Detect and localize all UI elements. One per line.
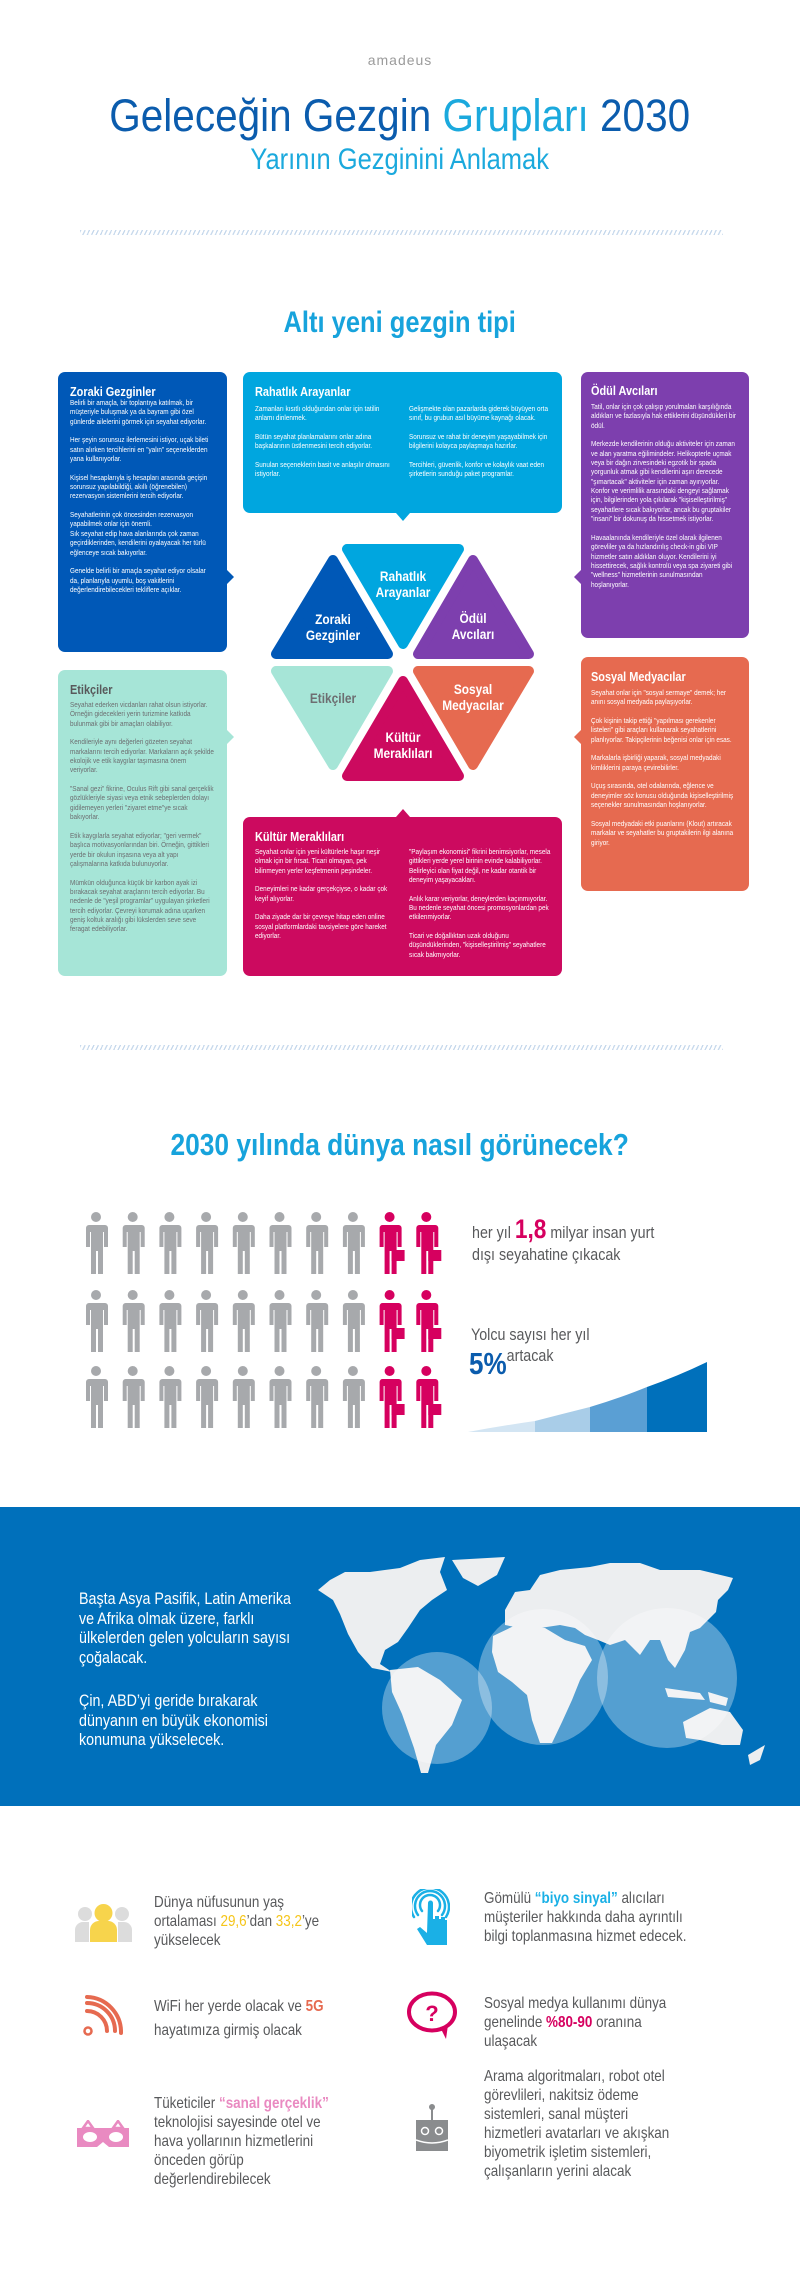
text: 5%artacak (469, 1346, 553, 1381)
heading: six traveller types: Altı yeni gezgin tipi (284, 306, 516, 339)
chart: hexagon of six traveller types (271, 544, 534, 781)
triangle: Ödül Avcıları: Ödül (459, 610, 487, 626)
text: age average: Dünya nüfusunun yaş (154, 1894, 284, 1911)
text: China economy: konumuna yükselecek. (79, 1730, 224, 1749)
text: bio signal: Gömülü “biyo sinyal” alıcıları (484, 1890, 665, 1907)
panel: Sosyal Medyacılar: Sosyal medyadaki etki puanlarını (Klout) artıracak markalar ve seyahatler bu gruptakilerin ilgi alanına giriyor. (591, 819, 733, 846)
text: virtual reality: önceden görüp (154, 2152, 244, 2169)
stat: 1.8 billion travellers (472, 1214, 654, 1264)
text: growth regions: Başta Asya Pasifik, Latin Amerika (79, 1589, 291, 1608)
text: virtual reality: hava yollarının hizmetlerini (154, 2133, 313, 2150)
panel: Etikçiler: "Sanal gezi" fikrine, Oculus Rift gibi sanal gerçeklik gözlükleriyle siyasi veya etnik sebeplerden dolayı gidilemeyen yerleri "ziyaret etme"ye sıcak bakıyorlar. (70, 784, 214, 821)
panel: Zoraki Gezginler: Kişisel hesaplarıyla iş hesapları arasında geçişin sorunsuz yapılabildiği, akıllı (öğrenebilen) rezervasyon sistemlerini tercih ediyorlar. (70, 473, 207, 500)
triangle: Zoraki Gezginler (276, 560, 388, 654)
panel: Sosyal Medyacılar: Uçuş sırasında, otel odalarında, eğlence ve deneyimler söz konusu olduğunda kişiselleştirilmiş seçenekler sunulmasından hoşlanıyorlar. (591, 781, 733, 809)
text: social media: genelinde %80-90 oranına (484, 2014, 642, 2031)
stat: 1.8 billion travellers: dışı seyahatine çıkacak (472, 1245, 620, 1264)
icon: question bubble (407, 1992, 457, 2039)
chart: growth area (468, 1362, 707, 1432)
panel: Sosyal Medyacılar: Çok kişinin takip ettiği "yapılması gerekenler listeleri" gibi araçları kullanarak seyahatlerini planlıyorlar. Takipçilerinin beğenisi onlar için esas. (591, 716, 732, 744)
panel: Ödül Avcıları: Merkezde kendilerinin olduğu aktiviteler için zaman ve alan yaratma eğilimindeler. Helikopterle uçmak veya bir dağın zirvesindeki egzotik bir spada yorgunluk atmak gibi kendilerini aşırı derecede "şımartacak" aktiviteler için zaman ayırıyorlar. Konfor ve verimlilik arasındaki dengeyi sağlamak için, bilgilerinden yola çıkılarak "kişiselleştirilmiş" seyahatlere sıcak bakıyorlar, ancak bu gruptakiler "insani" bir dokunuş da hissetmek istiyorlar. (591, 439, 735, 523)
icon: question bubble: ? (425, 2001, 439, 2026)
panel: Ödül Avcıları: Tatil, onlar için çok çalışıp yorulmaları karşılığında aldıkları ve fazlasıyla hak ettiklerini düşündükleri bir ödül. (591, 402, 736, 430)
pictogram: people (86, 1212, 442, 1428)
text: automation (484, 2068, 669, 2180)
text: wifi 5G (154, 1998, 324, 2039)
triangle: Kültür Meraklıları: Meraklıları (374, 745, 432, 761)
text: growth regions: çoğalacak. (79, 1648, 147, 1666)
heading: 2030 world: 2030 yılında dünya nasıl görünecek? (171, 1127, 629, 1162)
icon: people age (75, 1904, 132, 1942)
panel: Etikçiler: Seyahat ederken vicdanları rahat olsun istiyorlar. Örneğin gidecekleri yerin turizmine katkıda bulunmak gibi bir amaçları olabiliyor. (70, 700, 208, 728)
text: automation: hizmetleri avatarları ve akışkan (484, 2125, 669, 2142)
text: China economy: dünyanın en büyük ekonomisi (79, 1710, 268, 1730)
panel: Rahatlık Arayanlar: Sunulan seçeneklerin basit ve anlaşılır olmasını istiyorlar. (255, 460, 390, 478)
text: virtual reality: Tüketiciler “sanal gerçeklik” (154, 2095, 329, 2112)
panel: Zoraki Gezginler: Genelde belirli bir amaçla seyahat ediyor olsalar da, planlarıyla uyumlu, boş vakitlerini değerlendirebilecekleri tekliflere açıklar. (70, 566, 206, 594)
text: bio signal: müşteriler hakkında daha ayrıntılı (484, 1909, 683, 1926)
triangle: Rahatlık Arayanlar: Rahatlık (380, 568, 427, 584)
panel: Rahatlık Arayanlar: Sorunsuz ve rahat bir deneyim yaşayabilmek için bilgilerini kolayca paylaşmaya hazırlar. (409, 432, 547, 450)
panel: Rahatlık Arayanlar: Gelişmekte olan pazarlarda giderek büyüyen orta sınıf, bu grubun asıl büyüme kaynağı olacak. (409, 404, 548, 422)
panel: Kültür Meraklıları: Seyahat onlar için yeni kültürlerle haşır neşir olmak için bir fırsat. Ticari olmayan, pek bilinmeyen yerler keşfetmenin peşindeler. (255, 847, 380, 875)
subtitle: Yarının Gezginini Anlamak (251, 143, 549, 176)
triangle: Zoraki Gezginler: Gezginler (306, 627, 360, 643)
stat: 1.8 billion travellers: her yıl 1,8 milyar insan yurt (472, 1214, 654, 1244)
panel: Ödül Avcıları: Havaalanında kendileriyle özel olarak ilgilenen görevliler ya da hızlandırılış check-in gibi VIP hizmetler satın aldıkları oluyor. Kendilerini iyi hissettirecek, sağlık kontrolü veya spa ziyareti gibi "wellness" hizmetlerinin sunulmasından hoşlanıyorlar. (591, 533, 732, 589)
panel: Rahatlık Arayanlar: Tercihleri, güvenlik, konfor ve kolaylık vaat eden şirketlerin sunduğu paket programlar. (409, 460, 544, 478)
triangle: Rahatlık Arayanlar: Arayanlar (376, 584, 430, 600)
text: automation: Arama algoritmaları, robot otel (484, 2068, 665, 2085)
text: bio signal: bilgi toplanmasına hizmet edecek. (484, 1928, 686, 1945)
triangle: Rahatlık Arayanlar (347, 549, 459, 644)
panel: Kültür Meraklıları: Deneyimleri ne kadar gerçekçiyse, o kadar çok keyif alıyorlar. (255, 884, 387, 903)
triangle: Sosyal Medyacılar (418, 671, 529, 765)
panel: Ödül Avcıları (581, 372, 749, 638)
panel: Sosyal Medyacılar: Sosyal Medyacılar (591, 669, 686, 684)
icon: VR glasses (77, 2120, 129, 2147)
text: age average: ortalaması 29,6’dan 33,2’ye (154, 1913, 319, 1930)
text: wifi 5G: WiFi her yerde olacak ve 5G (154, 1998, 324, 2015)
panel: Sosyal Medyacılar: Seyahat onlar için "sosyal sermaye" demek; her anını sosyal medyada paylaşıyorlar. (591, 688, 726, 706)
text: virtual reality: değerlendirebilecek (154, 2171, 271, 2188)
text: automation: biyometrik işletim sistemleri, (484, 2144, 651, 2161)
text: social media: Sosyal medya kullanımı dünya (484, 1995, 666, 2012)
panel: Sosyal Medyacılar (581, 657, 749, 891)
triangle: Zoraki Gezginler: Zoraki (315, 611, 351, 627)
triangle: Ödül Avcıları: Avcıları (452, 626, 494, 642)
panel: Kültür Meraklıları: "Paylaşım ekonomisi" fikrini benimsiyorlar, mesela gittikleri yerde yerel birinin evinde kalabiliyorlar. Belirleyici olan fiyat değil, ne kadar otantik bir deneyim yaşayacakları. (409, 847, 550, 884)
triangle: Etikçiler: Etikçiler (310, 690, 356, 706)
panel: Zoraki Gezginler: Seyahatlerinin çok öncesinden rezervasyon yapabilmek onlar için önemli. (70, 510, 193, 528)
triangle: Kültür Meraklıları: Kültür (385, 729, 421, 745)
text: China economy: Çin, ABD’yi geride bırakarak (79, 1691, 258, 1710)
icon: robot (416, 2104, 448, 2151)
text: virtual reality (154, 2095, 329, 2188)
text: growth regions: ülkelerden gelen yolcuların sayısı (79, 1628, 290, 1647)
icon: touch hand (412, 1889, 450, 1945)
triangle: Kültür Meraklıları (347, 681, 459, 776)
logo: amadeus: amadeus (368, 52, 432, 68)
panel: Rahatlık Arayanlar: Rahatlık Arayanlar (255, 384, 350, 399)
panel: Etikçiler (58, 670, 227, 976)
triangle: Etikçiler (276, 671, 388, 765)
panel: Zoraki Gezginler (58, 372, 227, 652)
panel: Kültür Meraklıları (243, 817, 562, 976)
panel: Sosyal Medyacılar: Markalarla işbirliği yaparak, sosyal medyadaki kimliklerini paraya çevirebilirler. (591, 753, 721, 772)
text: virtual reality: teknolojisi sayesinde otel ve (154, 2114, 321, 2131)
panel: Kültür Meraklıları: Anlık karar veriyorlar, deneylerden kaçınmıyorlar. Bu nedenle seyahat öncesi promosyonlardan pek etkilenmiyorlar. (409, 894, 549, 921)
title: Geleceğin Gezgin Grupları 2030 (110, 90, 690, 141)
triangle: Sosyal Medyacılar: Medyacılar (442, 697, 504, 713)
text: social media: ulaşacak (484, 2033, 537, 2050)
panel: Zoraki Gezginler: Zoraki Gezginler (70, 384, 156, 399)
text: growth regions: ve Afrika olmak üzere, farklı (79, 1608, 254, 1628)
text: bio signal (484, 1890, 686, 1945)
stat: 5% passenger growth: Yolcu sayısı her yıl (471, 1325, 590, 1344)
panel: Zoraki Gezginler: Sık seyahat edip hava alanlarında çok zaman geçirdiklerinden, kendilerini oyalayacak her türlü eğlenceye sıcak bakıyorlar. (70, 529, 206, 556)
text: automation: görevlileri, nakitsiz ödeme (484, 2087, 639, 2104)
text: automation: çalışanların yerini alacak (484, 2163, 631, 2180)
triangle: Sosyal Medyacılar: Sosyal (454, 681, 492, 697)
panel: Kültür Meraklıları: Daha ziyade dar bir çevreye hitap eden online sosyal platformlardaki tavsiyelere göre hareket ediyorlar. (255, 912, 387, 940)
panel: Zoraki Gezginler: Belirli bir amaçla, bir toplantıya katılmak, bir müşteriyle buluşmak ya da bayram gibi özel günlerde ailelerini görmek için seyahat ediyorlar. (70, 398, 206, 426)
text: age average (154, 1894, 319, 1949)
text: wifi 5G: hayatımıza girmiş olacak (154, 2022, 302, 2039)
panel: Etikçiler: Mümkün olduğunca küçük bir karbon ayak izi bırakacak seyahat araçlarını tercih ediyorlar. Bu nedenle de "yeşil programlar" uygulayan şirketleri tercih ediyorlar. Çevreyi korumak adına uçarken geniş koltuk aralığı gibi lükslerden seve seve feragat edebiliyorlar. (70, 878, 210, 933)
triangle: Ödül Avcıları (418, 560, 529, 654)
panel: Zoraki Gezginler: Her şeyin sorunsuz ilerlemesini istiyor, uçak bileti satın alırken tercihlerini en "yalın" seçeneklerden yana kullanıyorlar. (70, 435, 208, 463)
panel: Rahatlık Arayanlar: Bütün seyahat planlamalarını onlar adına başkalarının üstlenmesini tercih ediyorlar. (255, 432, 372, 450)
map (318, 1557, 765, 1773)
text: age average: yükselecek (154, 1932, 220, 1949)
panel: Etikçiler: Etikçiler (70, 682, 112, 697)
panel: Kültür Meraklıları: Ticari ve doğallıktan uzak olduğunu düşündüklerinden, "kişiselleştirilmiş" seyahatlere sıcak bakmıyorlar. (409, 931, 546, 959)
panel: Etikçiler: Kendileriyle aynı değerleri gözeten seyahat markalarını tercih ediyorlar. Markaların açık şekilde ekolojik ve etik kaygılar taşımasına önem veriyorlar. (70, 737, 214, 774)
text: growth regions (79, 1589, 291, 1666)
panel: Ödül Avcıları: Ödül Avcıları (591, 383, 658, 398)
text: China economy (79, 1691, 268, 1749)
text: automation: sistemleri, sanal müşteri (484, 2106, 628, 2123)
panel: Rahatlık Arayanlar: Zamanları kısıtlı olduğundan onlar için tatilin anlamı dinlenmek. (255, 404, 379, 422)
panel: Kültür Meraklıları: Kültür Meraklıları (255, 829, 344, 844)
panel: Rahatlık Arayanlar (243, 372, 562, 513)
panel: Etikçiler: Etik kaygılarla seyahat ediyorlar; "geri vermek" başlıca motivasyonlarından biri. Örneğin, gittikleri yerde bir okulun inşasına veya alt yapı çalışmalarına katkıda bulunuyorlar. (70, 831, 209, 868)
text: social media (484, 1995, 666, 2050)
panel: blue world band (0, 1507, 800, 1806)
icon: wifi (83, 1995, 123, 2036)
